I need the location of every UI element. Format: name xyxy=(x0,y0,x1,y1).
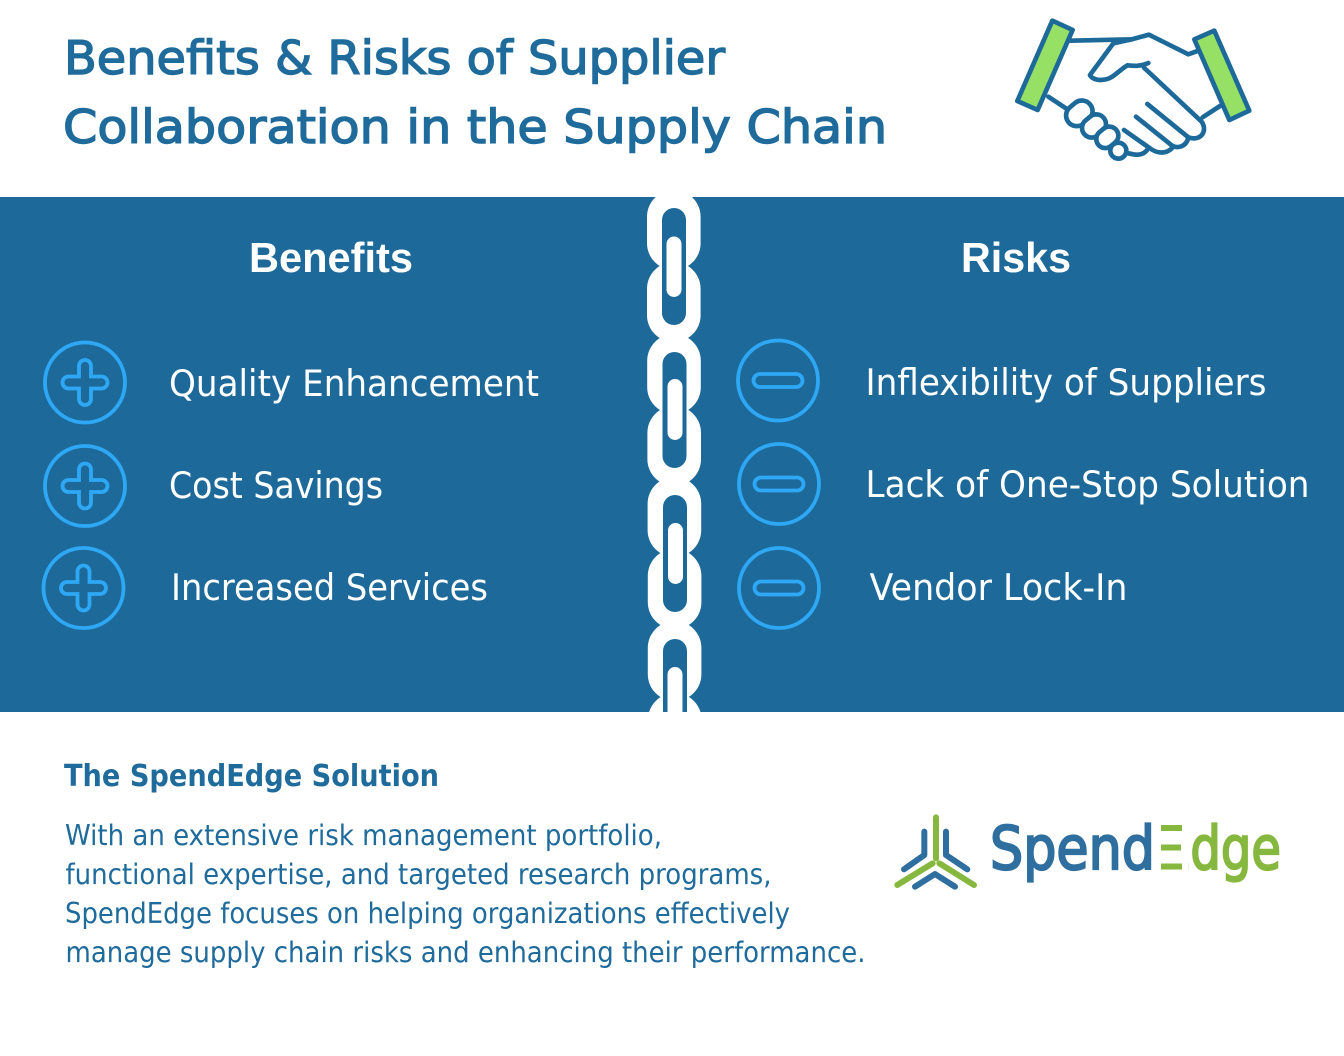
icon: minus 1 xyxy=(738,340,818,420)
logo wordmark: Edge xyxy=(1160,814,1281,884)
label: quality enhancement: Quality Enhancement xyxy=(169,362,539,405)
logo mark xyxy=(897,817,974,887)
title: Benefits & Risks of Supplier xyxy=(64,31,725,85)
panel: risks list xyxy=(738,340,1310,628)
title xyxy=(63,31,887,154)
text block: solution description: functional expertise, and targeted research programs, xyxy=(66,858,772,891)
text block: solution description: With an extensive risk management portfolio, xyxy=(65,819,662,852)
label: inflexibility of suppliers: Inflexibility of Suppliers xyxy=(866,361,1266,404)
panel: blue band xyxy=(0,197,1344,712)
label: vendor lock-in: Vendor Lock-In xyxy=(870,566,1128,609)
icon: minus 2 xyxy=(739,444,819,524)
icon: minus 3 xyxy=(739,548,819,628)
heading: risks: Risks xyxy=(961,234,1071,281)
logo wordmark xyxy=(990,814,1281,884)
text block: solution description: SpendEdge focuses on helping organizations effectively xyxy=(65,897,790,930)
logo: spendedge xyxy=(897,814,1281,887)
icon: handshake xyxy=(1017,21,1249,162)
text block: solution description: manage supply chain risks and enhancing their performance. xyxy=(66,936,866,969)
heading: benefits: Benefits xyxy=(249,234,413,281)
icon: plus 1 xyxy=(45,342,125,422)
label: lack of one-stop solution: Lack of One-Stop Solution xyxy=(866,463,1310,506)
icon: plus 2 xyxy=(45,446,125,526)
label: increased services: Increased Services xyxy=(171,566,488,609)
label: cost savings: Cost Savings xyxy=(169,464,383,507)
panel: benefits list xyxy=(44,342,539,628)
chain divider xyxy=(647,197,702,712)
logo wordmark: Spend xyxy=(990,814,1155,884)
icon: plus 3 xyxy=(44,548,124,628)
title: Collaboration in the Supply Chain xyxy=(63,100,887,154)
text block: solution description xyxy=(65,819,866,969)
heading: the spendedge solution: The SpendEdge Solution xyxy=(64,759,439,794)
